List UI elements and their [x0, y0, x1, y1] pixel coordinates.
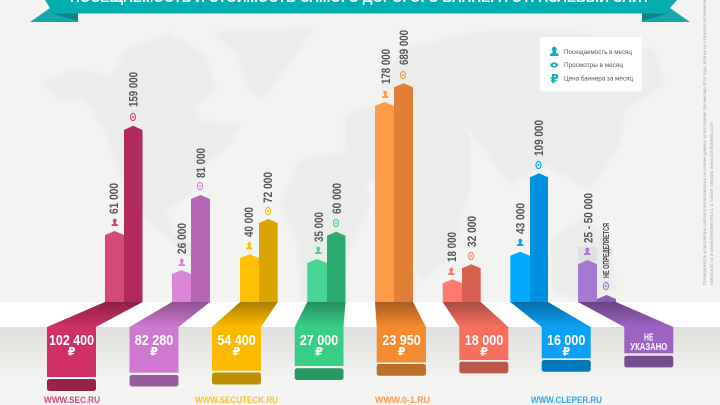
ruble: ₽ — [150, 346, 158, 358]
not specified: УКАЗАНО — [630, 341, 667, 353]
panel: www.sec.ru — [47, 72, 142, 391]
views value: 72 000 — [263, 172, 275, 203]
connector shade — [578, 302, 673, 327]
views value: 60 000 — [332, 183, 344, 214]
visits value: 18 000 — [447, 232, 459, 262]
price box — [130, 327, 178, 373]
connector — [130, 302, 210, 327]
price: 82 280 — [135, 333, 173, 349]
eye icon — [604, 282, 608, 290]
views bar — [124, 126, 142, 302]
visits value: 25 - 50 000 — [584, 193, 596, 243]
ruble: ₽ — [397, 346, 406, 358]
person icon — [517, 239, 524, 246]
visits value: 40 000 — [244, 207, 256, 237]
views bar — [597, 295, 616, 302]
connector shade — [510, 302, 591, 327]
visits value: 43 000 — [516, 203, 528, 234]
views value: 81 000 — [196, 148, 208, 178]
ruble: ₽ — [315, 346, 323, 358]
ruble: ₽ — [480, 346, 488, 358]
ribbon main — [50, 0, 670, 14]
world map — [40, 28, 665, 302]
price: 18 000 — [465, 333, 503, 349]
views bar — [462, 264, 481, 302]
connector shade — [212, 302, 278, 327]
connector — [212, 302, 278, 327]
footer tab — [542, 360, 591, 372]
visits value: 35 000 — [314, 212, 326, 242]
price box — [542, 327, 591, 358]
lower floor — [0, 382, 720, 405]
legend eye icon — [550, 62, 558, 68]
eye icon — [468, 252, 474, 260]
views value: 32 000 — [467, 216, 479, 247]
price: 27 000 — [300, 333, 338, 349]
legend ruble icon: ₽ — [550, 72, 559, 86]
person icon — [246, 242, 252, 250]
footer tab — [377, 364, 426, 376]
ruble: ₽ — [67, 346, 76, 358]
eye icon — [266, 207, 270, 215]
views value: 109 000 — [534, 120, 546, 156]
person icon — [382, 91, 388, 98]
note line 2: www.mail.ru и www.liveinternet.ru, а также сервис www.similarweb.com — [709, 122, 714, 285]
panel: red site — [443, 216, 508, 373]
price box — [459, 327, 508, 360]
connector shade — [130, 302, 210, 327]
side note — [701, 0, 714, 285]
ruble: ₽ — [232, 346, 241, 358]
connector — [295, 302, 346, 327]
person icon — [448, 268, 454, 275]
connector shade — [375, 302, 426, 327]
panel: purple site — [578, 193, 673, 367]
connector shade — [443, 302, 508, 327]
eye icon — [536, 161, 541, 169]
views value: 159 000 — [128, 72, 140, 107]
legend person icon — [550, 47, 558, 56]
views value: 689 000 — [399, 30, 411, 65]
price box — [212, 327, 261, 371]
visits value: 26 000 — [177, 223, 189, 254]
panel: www.0-1.ru — [375, 30, 426, 376]
connector — [510, 302, 591, 327]
price box — [624, 327, 673, 353]
connector — [578, 302, 673, 327]
panel: www.secuteck.ru — [130, 148, 210, 386]
eye icon — [334, 219, 338, 227]
footer tab — [212, 372, 261, 384]
views bar — [259, 219, 278, 302]
legend panel — [540, 37, 642, 92]
visits bar — [510, 252, 530, 302]
panel: www.cleper.ru — [510, 120, 591, 372]
footer tab — [624, 356, 673, 367]
visits bar — [375, 102, 394, 302]
views bar — [394, 83, 413, 302]
legend price text: Цена баннера за месяц — [564, 74, 633, 82]
visits bar — [307, 259, 327, 302]
person icon — [315, 247, 322, 254]
legend — [540, 37, 642, 92]
price: 16 000 — [547, 333, 585, 349]
connector shade — [295, 302, 346, 327]
footer tab — [459, 362, 508, 373]
price: 23 950 — [382, 333, 421, 349]
price: 54 400 — [217, 333, 256, 349]
not specified — [630, 332, 667, 353]
views bar — [327, 232, 346, 302]
price box — [377, 327, 426, 362]
ribbon left tail — [30, 0, 78, 22]
ruble: ₽ — [562, 346, 570, 358]
views bar — [191, 195, 210, 302]
ribbon right tail — [642, 0, 690, 22]
eye icon — [130, 113, 136, 121]
price box — [47, 327, 96, 377]
legend visits text: Посещаемость в месяц — [564, 49, 632, 56]
footer tab — [130, 375, 178, 386]
panel: green site — [295, 183, 346, 380]
price: 102 400 — [49, 333, 94, 349]
footer tab — [295, 368, 344, 380]
grey patch behind icon — [578, 247, 597, 261]
price box — [295, 327, 344, 366]
visits bar — [172, 270, 191, 302]
connector — [443, 302, 508, 327]
grey floor gradient — [0, 327, 720, 382]
visits value: 61 000 — [109, 183, 121, 214]
visits bar — [105, 231, 124, 302]
connector shade — [47, 302, 142, 327]
title ribbon — [30, 0, 690, 22]
views bar — [530, 173, 548, 302]
visits bar — [443, 279, 462, 302]
visits bar — [578, 260, 597, 302]
eye icon — [198, 182, 202, 190]
connector — [47, 302, 142, 327]
panel: yellow site — [212, 172, 278, 384]
white floor band — [0, 302, 720, 327]
person icon — [178, 259, 185, 266]
visits bar — [240, 254, 259, 302]
connector — [375, 302, 426, 327]
eye icon — [400, 71, 406, 79]
footer tab — [47, 379, 96, 391]
views value: НЕ ОПРЕДЕЛЯЕТСЯ — [602, 223, 611, 278]
person icon — [584, 248, 590, 255]
legend views text: Просмотры в месяц — [564, 62, 623, 69]
person icon — [112, 219, 118, 226]
site labels — [44, 395, 602, 405]
not specified: НЕ — [644, 332, 654, 344]
note line 1: Посещаемость и просмотры сайтов рассчитывались на основе данных за последние три месяца 2014 года, взятых из открытых источников — [701, 0, 707, 285]
visits value: 178 000 — [381, 49, 393, 84]
ribbon folds — [50, 13, 670, 21]
